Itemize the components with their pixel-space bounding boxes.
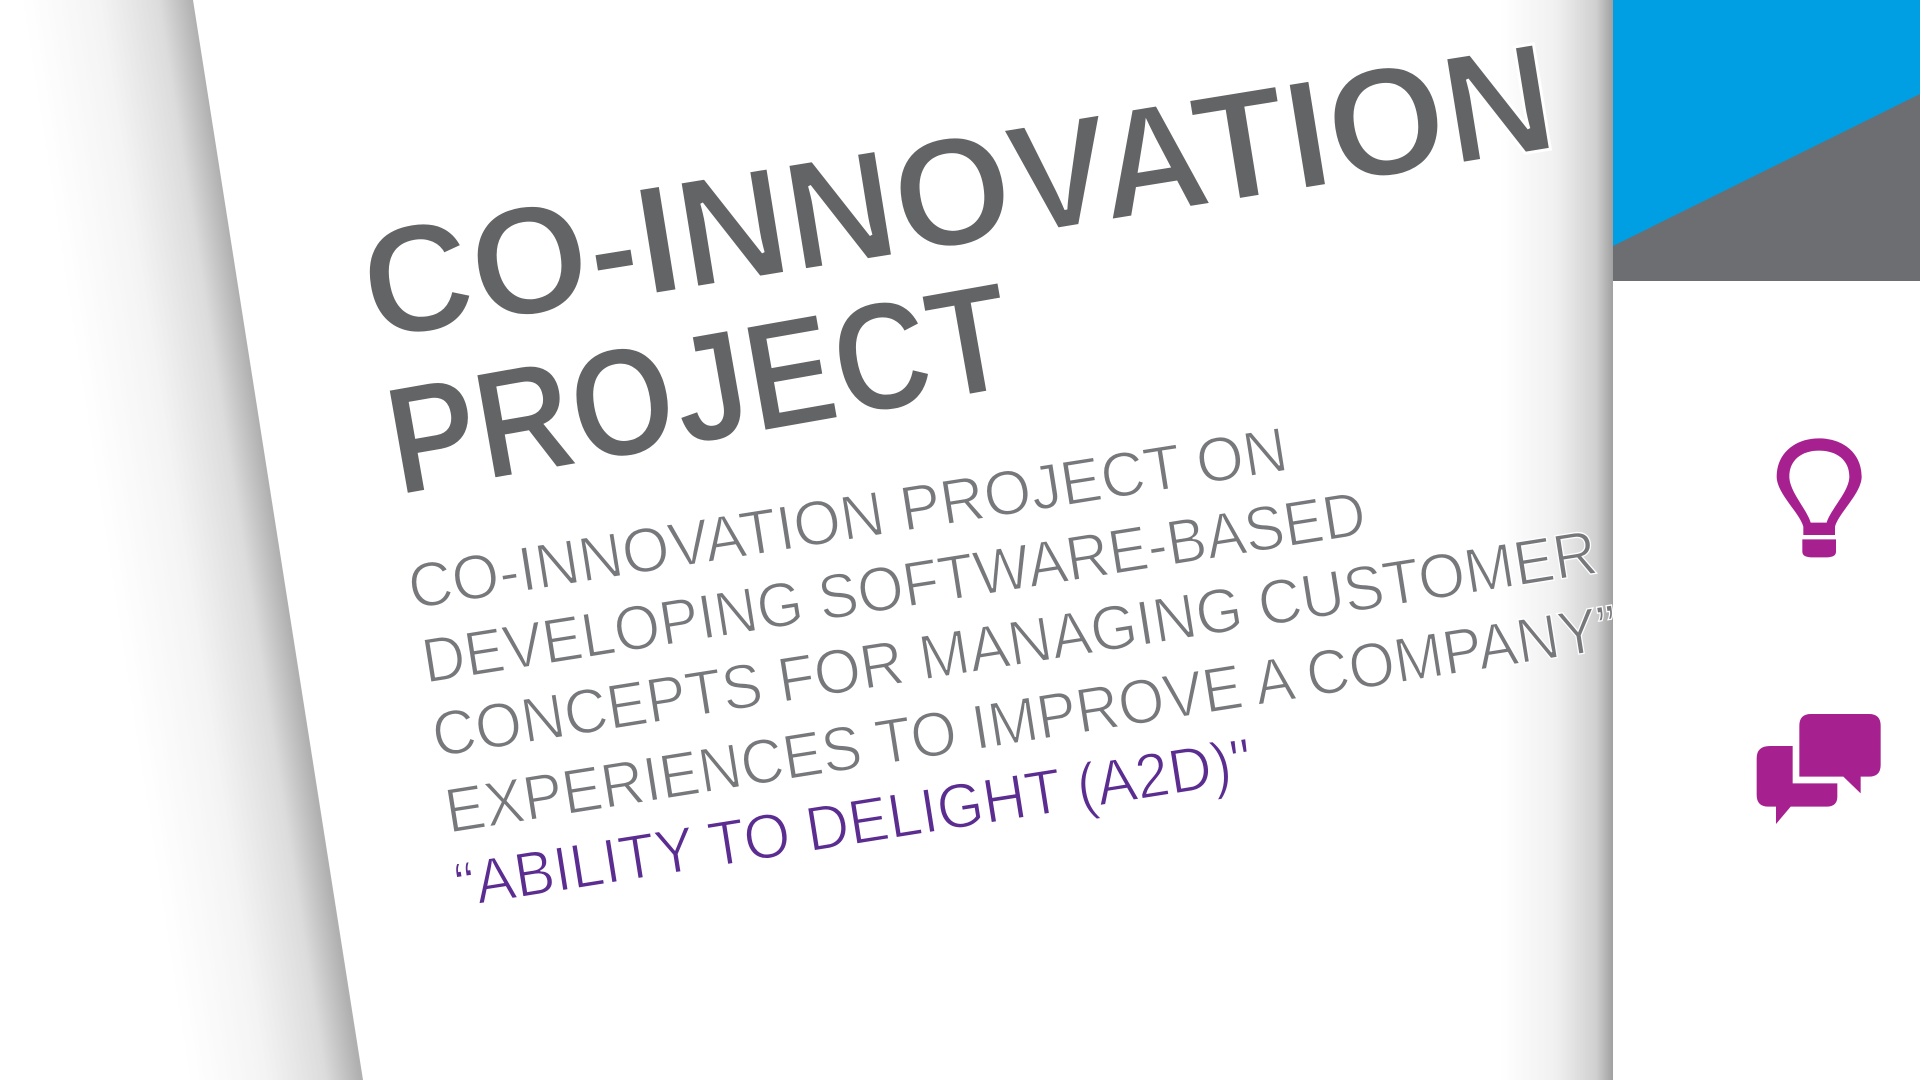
description text: CO-INNOVATION PROJECT ON — [403, 415, 1292, 623]
icon: speech bubbles — [1757, 714, 1881, 824]
title — [350, 9, 1566, 528]
description text: CONCEPTS FOR MANAGING CUSTOMER — [427, 517, 1602, 771]
title: PROJECT — [374, 249, 1024, 528]
description text: DEVELOPING SOFTWARE-BASED — [417, 478, 1370, 697]
left page fold shadow — [0, 0, 363, 1080]
icon: light bulb — [1777, 438, 1862, 557]
title: CO-INNOVATION — [350, 9, 1566, 373]
right page edge shadow — [1500, 0, 1613, 1080]
description text — [403, 415, 1623, 847]
panel: blue and grey corner banner — [1613, 0, 1920, 281]
highlighted quote text: “ABILITY TO DELIGHT (A2D)" — [450, 726, 1257, 921]
description text: EXPERIENCES TO IMPROVE A COMPANY” — [440, 592, 1623, 847]
